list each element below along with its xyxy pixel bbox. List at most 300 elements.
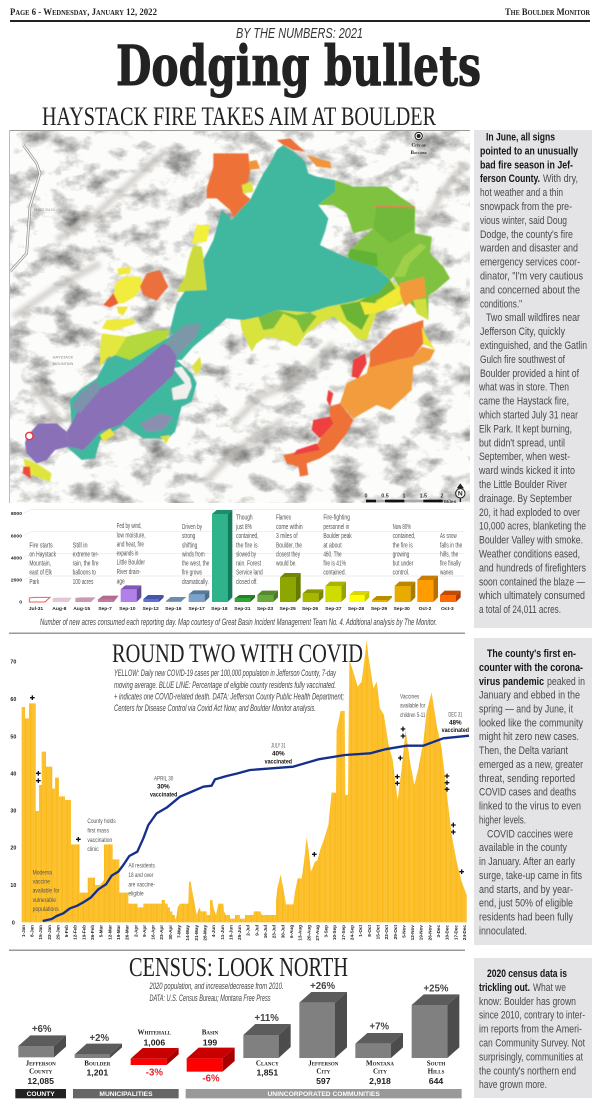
burn: red-orange top bbox=[207, 153, 252, 221]
panel: fire text: In June, all signs bbox=[486, 132, 555, 144]
dates: Sep-30 bbox=[393, 606, 410, 612]
heading: covid: ROUND TWO WITH COVID bbox=[112, 639, 363, 668]
annotation: as snow falls: falls in the bbox=[440, 542, 462, 549]
dates: Sep-17 bbox=[188, 606, 205, 612]
scale bar: 1.5 bbox=[420, 493, 427, 499]
note: mass vaccination clinic: clinic bbox=[87, 846, 99, 853]
annotation: driven by strong winds: Driven by bbox=[182, 524, 202, 531]
chart note: covid bbox=[114, 667, 344, 713]
scale bar: 2 bbox=[441, 493, 444, 499]
annotation: fire starts: Fire starts bbox=[29, 542, 53, 549]
burn: south fringe bbox=[240, 280, 407, 352]
page header: Page 6 - Wednesday, January 12, 2022 bbox=[10, 8, 157, 18]
note: all residents eligible: are vaccine- bbox=[128, 881, 155, 888]
x axis dates: 28-May bbox=[202, 925, 208, 941]
y axis: 40 bbox=[10, 771, 16, 777]
block: clancy: +11% bbox=[254, 1013, 279, 1024]
note: children vaccines: available for bbox=[400, 703, 425, 710]
annotation: now 80% contained: Now 80% bbox=[393, 524, 411, 531]
chart: census blocks bbox=[15, 981, 462, 1098]
panel: covid text: end, just 50% of eligible bbox=[479, 898, 573, 910]
annotation: fire-fighting personnel: at about bbox=[323, 542, 342, 549]
x axis dates: 16-Jul bbox=[263, 925, 268, 938]
category: county bbox=[15, 1089, 66, 1098]
panel: census text: trickling out. bbox=[479, 982, 530, 994]
note: moderna vaccine: Moderna bbox=[33, 869, 52, 876]
dates: Sep-10 bbox=[119, 606, 136, 612]
block: basin: Basin bbox=[202, 1029, 219, 1037]
note: mass vaccination clinic: County holds bbox=[87, 818, 116, 825]
panel: covid text: counter with the corona- bbox=[479, 662, 583, 674]
y axis bbox=[11, 511, 22, 605]
map place labels: MOUNTAIN bbox=[53, 362, 74, 366]
burn: lower right bbox=[340, 347, 435, 418]
panel: covid text: might hit zero new cases. bbox=[479, 731, 579, 743]
annotation: fire starts: on Haystack bbox=[29, 551, 56, 558]
annotation: now 80% contained: but under bbox=[393, 561, 414, 568]
note: all residents eligible: All residents bbox=[128, 863, 155, 870]
block: whitehall: Whitehall bbox=[137, 1029, 172, 1037]
burn: right green bbox=[318, 180, 450, 320]
panel: fire text: ward winds kicked it into bbox=[478, 465, 575, 477]
block: clancy: Clancy bbox=[256, 1059, 279, 1067]
death markers bbox=[30, 695, 464, 874]
block: montana city: City bbox=[373, 1068, 387, 1076]
panel: fire text: bad fire season in Jef- bbox=[480, 159, 573, 171]
panel: covid text: COVID caccines were bbox=[487, 828, 573, 840]
scale bar: 0 bbox=[365, 493, 368, 499]
x axis dates: 20-Aug bbox=[306, 925, 311, 941]
annotation: as snow falls: fire finally bbox=[440, 561, 461, 568]
block: south hills: Hills bbox=[428, 1068, 445, 1076]
category: municipalities bbox=[73, 1089, 179, 1098]
panel: covid text: innoculated. bbox=[479, 925, 527, 937]
annotation: fire-fighting personnel: 460. The bbox=[323, 551, 342, 558]
block: montana city: Montana bbox=[366, 1059, 394, 1067]
bar chart: new acres per reporting day bbox=[11, 509, 465, 612]
annotation: fed by wind: low moisture, bbox=[117, 532, 146, 539]
annotation: driven by strong winds: fire grows bbox=[182, 570, 202, 577]
panel: covid text: threat, sending reported bbox=[479, 773, 575, 785]
annotation: flames within 3 miles: closest they bbox=[276, 551, 300, 558]
x axis dates: 10-Dec bbox=[445, 925, 450, 940]
block: jefferson county: County bbox=[29, 1068, 53, 1076]
x axis dates: 2-Jul bbox=[246, 925, 251, 936]
category: municipalities: MUNICIPALITIES bbox=[99, 1091, 153, 1098]
x axis dates: 27-Aug bbox=[315, 925, 320, 941]
block: whitehall: -3% bbox=[146, 1068, 163, 1079]
annotation: flames within 3 miles bbox=[275, 515, 303, 568]
note: dec 31 bbox=[442, 711, 469, 734]
note: moderna vaccine: vaccine bbox=[33, 879, 50, 886]
panel: fire text: Boulder provided a hint of bbox=[480, 368, 579, 380]
note: july 31 bbox=[265, 743, 292, 766]
x axis dates: 8-Jan bbox=[30, 925, 34, 937]
note: july 31: vaccinated bbox=[265, 759, 292, 766]
panel: fire text: what was in store. Then bbox=[478, 382, 569, 394]
block: boulder: 1,201 bbox=[86, 1068, 108, 1078]
block: south hills: +25% bbox=[424, 984, 449, 995]
panel: covid text: linked to the virus to even bbox=[479, 801, 581, 813]
annotation: driven by strong winds bbox=[181, 524, 209, 586]
x axis dates: 9-Apr bbox=[142, 925, 147, 937]
icon: north arrow: N bbox=[458, 491, 463, 498]
annotation: fed by wind: and heat, fire bbox=[117, 541, 144, 548]
note: moderna vaccine: populations bbox=[33, 906, 59, 913]
annotation: though just 8% contained: contained, bbox=[236, 533, 259, 540]
block: jefferson city bbox=[299, 981, 347, 1086]
note: all residents eligible: eligible bbox=[128, 891, 144, 898]
burn: southwest tip bbox=[23, 458, 52, 482]
dates bbox=[29, 606, 454, 612]
panel: fire text: Gulch fire southwest of bbox=[480, 354, 565, 366]
panel: fire text: vious winter, said Doug bbox=[480, 215, 567, 227]
burn: orange east bbox=[400, 277, 426, 307]
dates: Sep-26 bbox=[302, 606, 318, 612]
dates: Sep-16 bbox=[165, 606, 182, 612]
annotation: now 80% contained: growing bbox=[393, 551, 409, 558]
x axis dates: 26-Feb bbox=[90, 925, 95, 940]
y axis: 2000 bbox=[11, 578, 22, 584]
note: children vaccines: children 5-11 bbox=[400, 712, 426, 719]
map place labels: HAYSTACK bbox=[53, 355, 74, 359]
panel: covid text: available in the county bbox=[479, 842, 568, 854]
chart note: covid: YELLOW: Daily new COVID-19 cases per 100,000 population in Jefferson County, 7-day bbox=[114, 667, 337, 678]
dates: Sep-25 bbox=[279, 606, 296, 612]
y axis: 6000 bbox=[11, 533, 22, 539]
note: dec 31: vaccinated bbox=[442, 727, 469, 734]
annotation: now 80% contained: contained, bbox=[393, 533, 415, 540]
annotation: fire-fighting personnel: fire is 41% bbox=[323, 561, 346, 568]
note: all residents eligible: 18 and over bbox=[128, 872, 153, 879]
panel: census text: know: Boulder has grown bbox=[479, 996, 576, 1008]
scale bar: 0.5 bbox=[381, 493, 389, 499]
x axis dates: 7-May bbox=[176, 925, 182, 938]
annotation: flames within 3 miles: Flames bbox=[276, 515, 291, 522]
panel: covid text: residents had been fully bbox=[479, 912, 574, 924]
annotation: fire starts bbox=[29, 542, 56, 586]
scale bar: 1 bbox=[403, 493, 406, 499]
annotation: now 80% contained bbox=[393, 524, 415, 577]
map: haystack fire perimeter bbox=[9, 130, 470, 505]
note: moderna vaccine: vulnerable bbox=[33, 897, 56, 904]
x axis dates bbox=[21, 925, 467, 941]
block: boulder bbox=[75, 1033, 122, 1078]
burn: purple bbox=[163, 323, 202, 357]
annotation: though just 8% contained: Service land bbox=[236, 570, 263, 577]
chart note: covid: Centers for Disease Control via Covid Act Now; and Boulder Monitor analysis. bbox=[114, 702, 316, 713]
note: july 31: 40% bbox=[272, 751, 285, 758]
x axis dates: 16-Apr bbox=[151, 925, 156, 940]
x axis dates: 12-Nov bbox=[410, 925, 415, 940]
scale bar bbox=[365, 493, 457, 505]
chart note: covid: moving average. BLUE LINE: Percentage of eligible county residents fully vaccinated. bbox=[114, 679, 336, 690]
note: mass vaccination clinic: vaccination bbox=[87, 837, 113, 844]
annotation: as snow falls bbox=[439, 533, 462, 577]
annotation: as snow falls: As snow bbox=[440, 533, 457, 540]
panel: fire text: but didn't spread, until bbox=[479, 437, 565, 449]
panel: fire text: which started July 31 near bbox=[478, 410, 578, 422]
note: mass vaccination clinic bbox=[87, 818, 116, 853]
note: children vaccines bbox=[400, 694, 426, 719]
x axis dates: 15-Oct bbox=[376, 925, 380, 939]
x axis dates: 5-Feb bbox=[64, 925, 69, 937]
y axis: 70 bbox=[10, 660, 16, 666]
x axis dates: 29-Jan bbox=[55, 925, 60, 940]
note: dec 31: DEC 31 bbox=[448, 711, 463, 718]
y axis: 20 bbox=[10, 846, 16, 852]
dates: Aug-8 bbox=[52, 606, 67, 612]
note: april 30: APRIL 30 bbox=[154, 775, 174, 782]
bars: daily cases bbox=[22, 640, 467, 922]
panel: census text: im reports from the Ameri- bbox=[479, 1024, 582, 1036]
scale bar: Miles bbox=[444, 499, 457, 505]
block: basin: 199 bbox=[203, 1038, 217, 1048]
annotation: driven by strong winds: dramatically. bbox=[182, 579, 209, 586]
y axis: 50 bbox=[10, 734, 16, 740]
dates: Sep-7 bbox=[98, 606, 112, 612]
panel: census text bbox=[474, 958, 592, 1098]
chart note: census: DATA: U.S. Census Bureau; Montana Free Press bbox=[150, 992, 271, 1003]
annotation: though just 8% contained: closed off. bbox=[236, 579, 258, 586]
annotation: fire-fighting personnel: Fire-fighting bbox=[323, 515, 350, 522]
panel: fire text: drainage. By September bbox=[479, 493, 572, 505]
block: jefferson city: 597 bbox=[316, 1076, 331, 1086]
icon: city of boulder: City of bbox=[411, 144, 426, 149]
x axis dates: 23-Jul bbox=[272, 925, 277, 938]
panel: fire text: Dodge, the county's fire bbox=[480, 229, 573, 241]
panel: fire text: With dry, bbox=[543, 173, 578, 185]
panel: fire text: September, when west- bbox=[479, 451, 570, 463]
block: basin bbox=[187, 1029, 235, 1085]
category: county: COUNTY bbox=[27, 1091, 55, 1098]
dates: Oct-2 bbox=[419, 606, 432, 612]
road bbox=[10, 145, 40, 272]
dates: Sep-28 bbox=[348, 606, 364, 612]
x axis dates: 26-Nov bbox=[427, 925, 432, 940]
burn: left yellow-green bbox=[100, 333, 127, 367]
x axis dates: 5-Nov bbox=[401, 925, 406, 938]
y axis: 4000 bbox=[11, 555, 22, 561]
y axis: 10 bbox=[10, 883, 16, 889]
note: july 31: JULY 31 bbox=[271, 743, 286, 750]
x axis dates: 22-Jan bbox=[47, 925, 52, 940]
y axis: 30 bbox=[10, 809, 16, 815]
x axis dates: 12-Feb bbox=[73, 925, 78, 940]
panel: covid text: The county's first en- bbox=[487, 648, 576, 660]
icon: city of boulder: Boulder bbox=[411, 151, 428, 156]
panel: fire text: a total of 24,011 acres. bbox=[479, 604, 561, 616]
annotation: as snow falls: wanes bbox=[439, 570, 454, 577]
heading: haystack fire: HAYSTACK FIRE TAKES AIM AT BOULDER bbox=[42, 102, 437, 131]
note: april 30: vaccinated bbox=[150, 791, 177, 798]
chart: covid cases and vaccination bbox=[10, 640, 469, 941]
block: whitehall: 1,006 bbox=[143, 1038, 165, 1048]
chart note: census: 2020 population, and increase/decrease from 2010. bbox=[149, 980, 284, 991]
x axis dates: 3-Dec bbox=[436, 925, 441, 938]
annotation: fire starts: Park bbox=[29, 579, 40, 586]
panel: covid text bbox=[474, 638, 592, 945]
category: unincorporated communities: UNINCORPORATED COMMUNITIES bbox=[268, 1091, 380, 1098]
dates: Sep-27 bbox=[325, 606, 342, 612]
annotation: though just 8% contained: the fire is bbox=[236, 542, 258, 549]
block: jefferson county: +6% bbox=[32, 1024, 52, 1035]
annotation: fire starts: Mountain, bbox=[29, 561, 51, 568]
x axis dates: 12-Mar bbox=[107, 925, 112, 940]
annotation: still in extreme terrain bbox=[73, 542, 99, 586]
icon: north arrow bbox=[456, 483, 465, 502]
bars bbox=[29, 510, 461, 602]
note: dec 31: 48% bbox=[449, 719, 462, 726]
x axis dates: 18-Jun bbox=[228, 925, 233, 940]
x axis dates: 22-Oct bbox=[384, 925, 389, 939]
annotation: still in extreme terrain: 100 acres bbox=[73, 579, 94, 586]
block: montana city: +7% bbox=[370, 1022, 390, 1033]
panel: covid text: and starts, and by year- bbox=[479, 884, 573, 896]
icon: ignition point bbox=[26, 432, 33, 440]
annotation: still in extreme terrain: balloons to bbox=[73, 570, 96, 577]
panel: census text: the county's northern end bbox=[479, 1065, 576, 1077]
x axis dates: 11-Jun bbox=[220, 925, 225, 940]
annotation: though just 8% contained: slowed by bbox=[236, 551, 256, 558]
x axis dates: 4-Jun bbox=[211, 925, 216, 937]
block: clancy bbox=[243, 1013, 291, 1078]
x axis dates: 30-Apr bbox=[168, 925, 173, 940]
panel: census text: What we bbox=[533, 982, 566, 994]
chart note: covid: + indicates one COVID-related death. DATA: Jefferson County Public Health Department; bbox=[114, 690, 344, 702]
block: basin: -6% bbox=[202, 1074, 220, 1085]
block: clancy: 1,851 bbox=[256, 1068, 278, 1078]
panel: census text: 2020 census data is bbox=[487, 968, 567, 980]
x axis dates: 6-Aug bbox=[289, 925, 294, 938]
note: moderna vaccine: available for bbox=[33, 888, 59, 895]
dates: Sep-29 bbox=[371, 606, 387, 612]
x axis dates: 24-Sep bbox=[350, 925, 354, 940]
panel: covid text: Then, the Delta variant bbox=[479, 745, 568, 757]
note: all residents eligible bbox=[128, 863, 155, 898]
panel: fire text: warden and disaster and bbox=[479, 243, 578, 255]
note: april 30 bbox=[150, 775, 177, 798]
annotation: driven by strong winds: winds from bbox=[181, 551, 205, 558]
annotation: fire-fighting personnel: Boulder peak bbox=[323, 533, 352, 540]
block: jefferson county bbox=[18, 1024, 66, 1086]
x axis dates: 21-May bbox=[194, 925, 199, 941]
x axis dates: 13-Aug bbox=[298, 925, 303, 941]
panel: fire text: emergency services coor- bbox=[480, 257, 580, 269]
x axis dates: 10-Sep bbox=[332, 925, 337, 940]
dates: Sep-12 bbox=[142, 606, 159, 612]
panel: fire text: came the Haystack fire, bbox=[479, 396, 569, 408]
block: south hills: 644 bbox=[429, 1076, 443, 1086]
annotation: driven by strong winds: shifting bbox=[182, 542, 197, 549]
x axis dates: 30-Jul bbox=[280, 925, 285, 938]
annotation: still in extreme terrain: Still in bbox=[73, 542, 88, 549]
x axis dates: 24-Dec bbox=[462, 925, 467, 940]
x axis dates: 14-May bbox=[185, 925, 190, 941]
dates: Oct-3 bbox=[441, 606, 454, 612]
annotation: now 80% contained: the fire is bbox=[393, 542, 413, 549]
block: jefferson city: +26% bbox=[310, 981, 336, 992]
panel: fire text: ferson County. bbox=[480, 173, 540, 185]
page header: The Boulder Monitor bbox=[505, 8, 591, 18]
annotation: fire-fighting personnel: contained. bbox=[323, 570, 346, 577]
panel: covid text: in January. After an early bbox=[479, 856, 576, 868]
annotation: though just 8% contained bbox=[235, 515, 263, 586]
block: south hills: South bbox=[427, 1059, 445, 1067]
burn: teal main bbox=[170, 145, 390, 360]
panel: fire text: conditions." bbox=[480, 298, 522, 310]
x axis dates: 17-Sep bbox=[341, 925, 346, 940]
page header bbox=[10, 8, 591, 22]
x axis dates: 29-Oct bbox=[393, 925, 398, 939]
dates: Aug-15 bbox=[73, 606, 90, 612]
block: montana city bbox=[355, 1022, 403, 1086]
block: south hills bbox=[412, 984, 459, 1086]
block: montana city: 2,918 bbox=[369, 1076, 391, 1086]
heading: census: CENSUS: LOOK NORTH bbox=[129, 952, 348, 982]
block: jefferson city: Jefferson bbox=[308, 1059, 339, 1067]
x axis dates: 5-Mar bbox=[99, 925, 104, 937]
panel: covid text: COVID cases and deaths bbox=[479, 787, 576, 799]
panel: census text: have grown more. bbox=[479, 1079, 547, 1091]
kicker: BY THE NUMBERS: 2021 bbox=[236, 25, 363, 42]
note: children vaccines: Vaccines bbox=[400, 694, 419, 701]
annotation: fed by wind: age bbox=[117, 578, 125, 585]
annotation: fire-fighting personnel bbox=[323, 515, 352, 577]
panel: fire text: snowpack from the pre- bbox=[480, 201, 572, 213]
note: april 30: 30% bbox=[157, 784, 170, 791]
dates: Sep-18 bbox=[211, 606, 228, 612]
block: boulder: Boulder bbox=[84, 1059, 111, 1067]
x axis dates: 23-Apr bbox=[159, 925, 164, 940]
burn: teal southwest bbox=[67, 330, 197, 460]
annotation: still in extreme terrain: extreme ter- bbox=[73, 551, 99, 558]
panel: fire text: the Little Boulder River bbox=[479, 479, 567, 491]
x axis dates: 19-Feb bbox=[81, 925, 86, 940]
annotation: fed by wind: River drain- bbox=[117, 569, 141, 576]
x axis dates: 26-Mar bbox=[125, 925, 130, 940]
y axis: 0 bbox=[12, 920, 15, 926]
y axis: 0 bbox=[19, 599, 22, 605]
x axis dates: 9-Jul bbox=[254, 925, 259, 936]
dates: Jul-31 bbox=[29, 606, 43, 612]
annotation: flames within 3 miles: come within bbox=[276, 524, 303, 531]
panel: fire text: dinator, "I'm very cautious bbox=[480, 270, 583, 282]
category: unincorporated communities bbox=[186, 1089, 462, 1098]
panel: fire text: and concerned about the bbox=[480, 284, 580, 296]
annotation: fed by wind: Fed by wind, bbox=[117, 523, 142, 530]
annotation: now 80% contained: control. bbox=[393, 570, 409, 577]
block: whitehall bbox=[131, 1029, 179, 1079]
annotation: still in extreme terrain: rain, the fire bbox=[73, 561, 99, 568]
annotation: driven by strong winds: strong bbox=[182, 533, 195, 540]
block: jefferson county: 12,085 bbox=[27, 1076, 54, 1086]
x axis dates: 3-Sep bbox=[324, 925, 329, 938]
panel: covid text: peaked in bbox=[547, 676, 585, 688]
panel: covid text: January and ebbed in the bbox=[479, 690, 580, 702]
line: percent vaccinated bbox=[43, 736, 469, 921]
annotation: driven by strong winds: the west, the bbox=[182, 561, 209, 568]
panel: fire text bbox=[474, 130, 592, 628]
burn: left cluster bbox=[113, 277, 143, 303]
annotation: though just 8% contained: just 8% bbox=[235, 524, 252, 531]
note: mass vaccination clinic: first mass bbox=[87, 827, 109, 834]
x axis dates: 19-Nov bbox=[419, 925, 424, 940]
panel: covid text: looked like the community bbox=[479, 717, 584, 729]
panel: covid text: virus pandemic bbox=[479, 676, 544, 688]
annotation: though just 8% contained: rain. Forest bbox=[236, 561, 261, 568]
icon: city of boulder bbox=[411, 132, 428, 156]
